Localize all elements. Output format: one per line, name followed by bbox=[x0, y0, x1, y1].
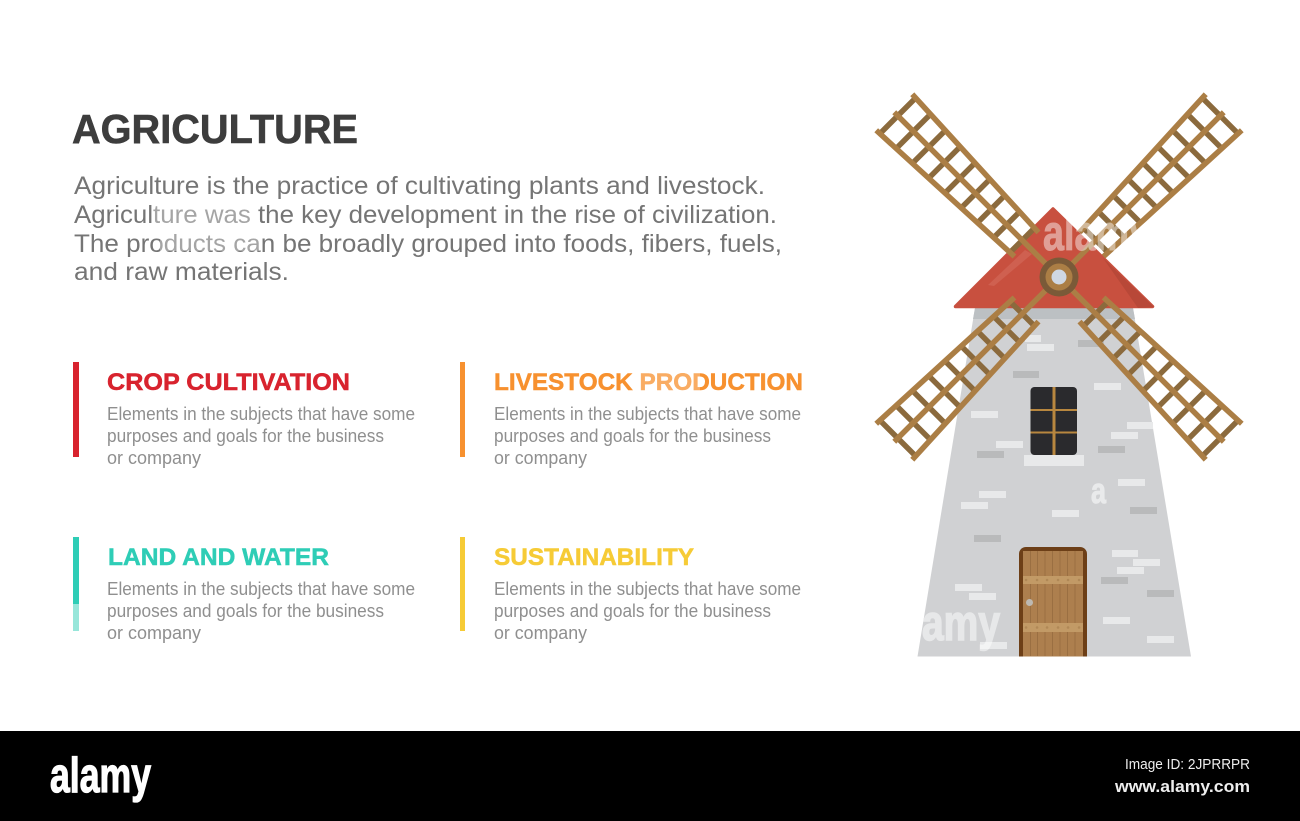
sail: lower right bbox=[1048, 266, 1242, 460]
footer image id: Image ID: 2JPRRPR bbox=[1125, 757, 1250, 773]
panel: land and water: LAND AND WATER bbox=[108, 544, 329, 571]
panel: crop cultivation: or company bbox=[107, 448, 201, 468]
panel: livestock production: LIVESTOCK PRODUCTION bbox=[494, 369, 803, 396]
panel: sustainability: or company bbox=[494, 623, 587, 643]
intro text block: Agriculture was the key development in the rise of civilization. bbox=[74, 201, 777, 229]
panel: crop cultivation: CROP CULTIVATION bbox=[107, 369, 350, 396]
intro text block: The products can be broadly grouped into foods, fibers, fuels, bbox=[74, 230, 782, 258]
intro text block: and raw materials. bbox=[74, 258, 289, 286]
panel: livestock production bbox=[460, 362, 803, 468]
intro text block bbox=[74, 172, 782, 286]
intro text block: Agriculture is the practice of cultivating plants and livestock. bbox=[74, 172, 765, 200]
watermark letters bbox=[922, 205, 1150, 651]
panel: land and water: or company bbox=[107, 623, 201, 643]
panel: livestock production: or company bbox=[494, 448, 587, 468]
panel: land and water: purposes and goals for the business bbox=[107, 601, 384, 621]
panel: land and water: Elements in the subjects that have some bbox=[107, 579, 415, 599]
sail: lower left bbox=[876, 266, 1070, 460]
footer image id bbox=[1114, 757, 1250, 796]
windmill tower bbox=[918, 308, 1191, 656]
tower bricks bbox=[955, 335, 1174, 649]
panel: sustainability: SUSTAINABILITY bbox=[494, 544, 694, 571]
panel: crop cultivation: Elements in the subjects that have some bbox=[107, 404, 415, 424]
footer image id: www.alamy.com bbox=[1114, 778, 1250, 796]
illustration: windmill bbox=[876, 94, 1242, 657]
panel: crop cultivation: purposes and goals for the business bbox=[107, 426, 384, 446]
hub bbox=[1040, 258, 1078, 296]
panel: sustainability: Elements in the subjects that have some bbox=[494, 579, 801, 599]
door bbox=[1019, 547, 1087, 656]
title: AGRICULTURE bbox=[72, 106, 358, 152]
watermark letters: alamy bbox=[1043, 205, 1150, 261]
watermark letters: amy bbox=[922, 595, 1000, 651]
footer logo: alamy bbox=[50, 749, 151, 803]
panel: land and water bbox=[73, 537, 415, 643]
panel: sustainability bbox=[460, 537, 801, 643]
panel: sustainability: purposes and goals for the business bbox=[494, 601, 771, 621]
roof bbox=[956, 209, 1154, 308]
panel: livestock production: purposes and goals for the business bbox=[494, 426, 771, 446]
panel: crop cultivation bbox=[73, 362, 415, 468]
watermark letters: a bbox=[1091, 470, 1107, 511]
window bbox=[1024, 387, 1084, 466]
sail: upper right bbox=[1048, 94, 1242, 288]
sail: upper left bbox=[876, 94, 1070, 288]
footer bar bbox=[0, 731, 1300, 821]
panel: livestock production: Elements in the subjects that have some bbox=[494, 404, 801, 424]
